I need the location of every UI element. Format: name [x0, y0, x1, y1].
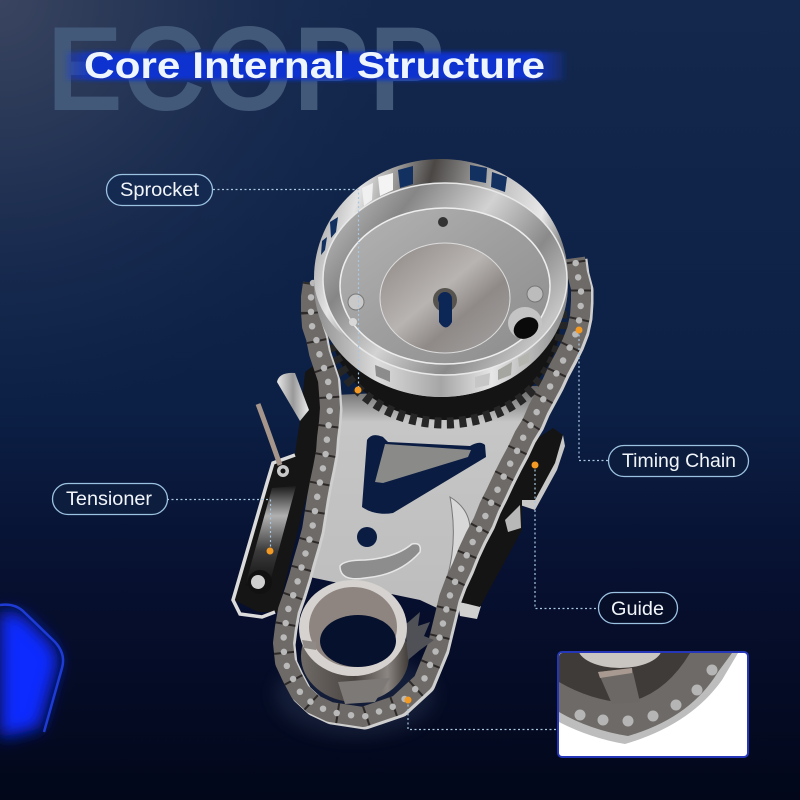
brand watermark: ECOPP	[47, 2, 445, 136]
guide	[452, 428, 565, 619]
cup windows	[321, 165, 530, 388]
callout: Tensioner: Tensioner	[66, 489, 153, 510]
callout: Guide	[532, 462, 678, 624]
timing assembly	[233, 159, 583, 737]
drive gear	[328, 221, 562, 423]
callout: Timing Chain	[576, 326, 748, 476]
backing plate	[300, 385, 555, 615]
keyhole	[433, 288, 457, 328]
timing chain	[283, 258, 583, 719]
callout: detail leader	[404, 696, 557, 730]
background corner light	[0, 0, 500, 450]
oil port	[508, 307, 542, 343]
camshaft phaser cup	[314, 159, 568, 397]
blue hexagon accent	[0, 605, 63, 738]
tensioner	[233, 366, 325, 617]
soft glow	[275, 653, 435, 737]
callout: Sprocket	[106, 174, 362, 394]
callout: Sprocket: Sprocket	[120, 180, 200, 201]
title: Core Internal Structure	[84, 45, 545, 86]
fasteners	[348, 217, 543, 326]
callout: Guide: Guide	[611, 599, 664, 620]
camshaft sprocket	[299, 580, 434, 704]
callout: Timing Chain: Timing Chain	[622, 451, 736, 472]
inset: chain close-up	[557, 651, 749, 758]
callout: Tensioner	[52, 484, 274, 554]
